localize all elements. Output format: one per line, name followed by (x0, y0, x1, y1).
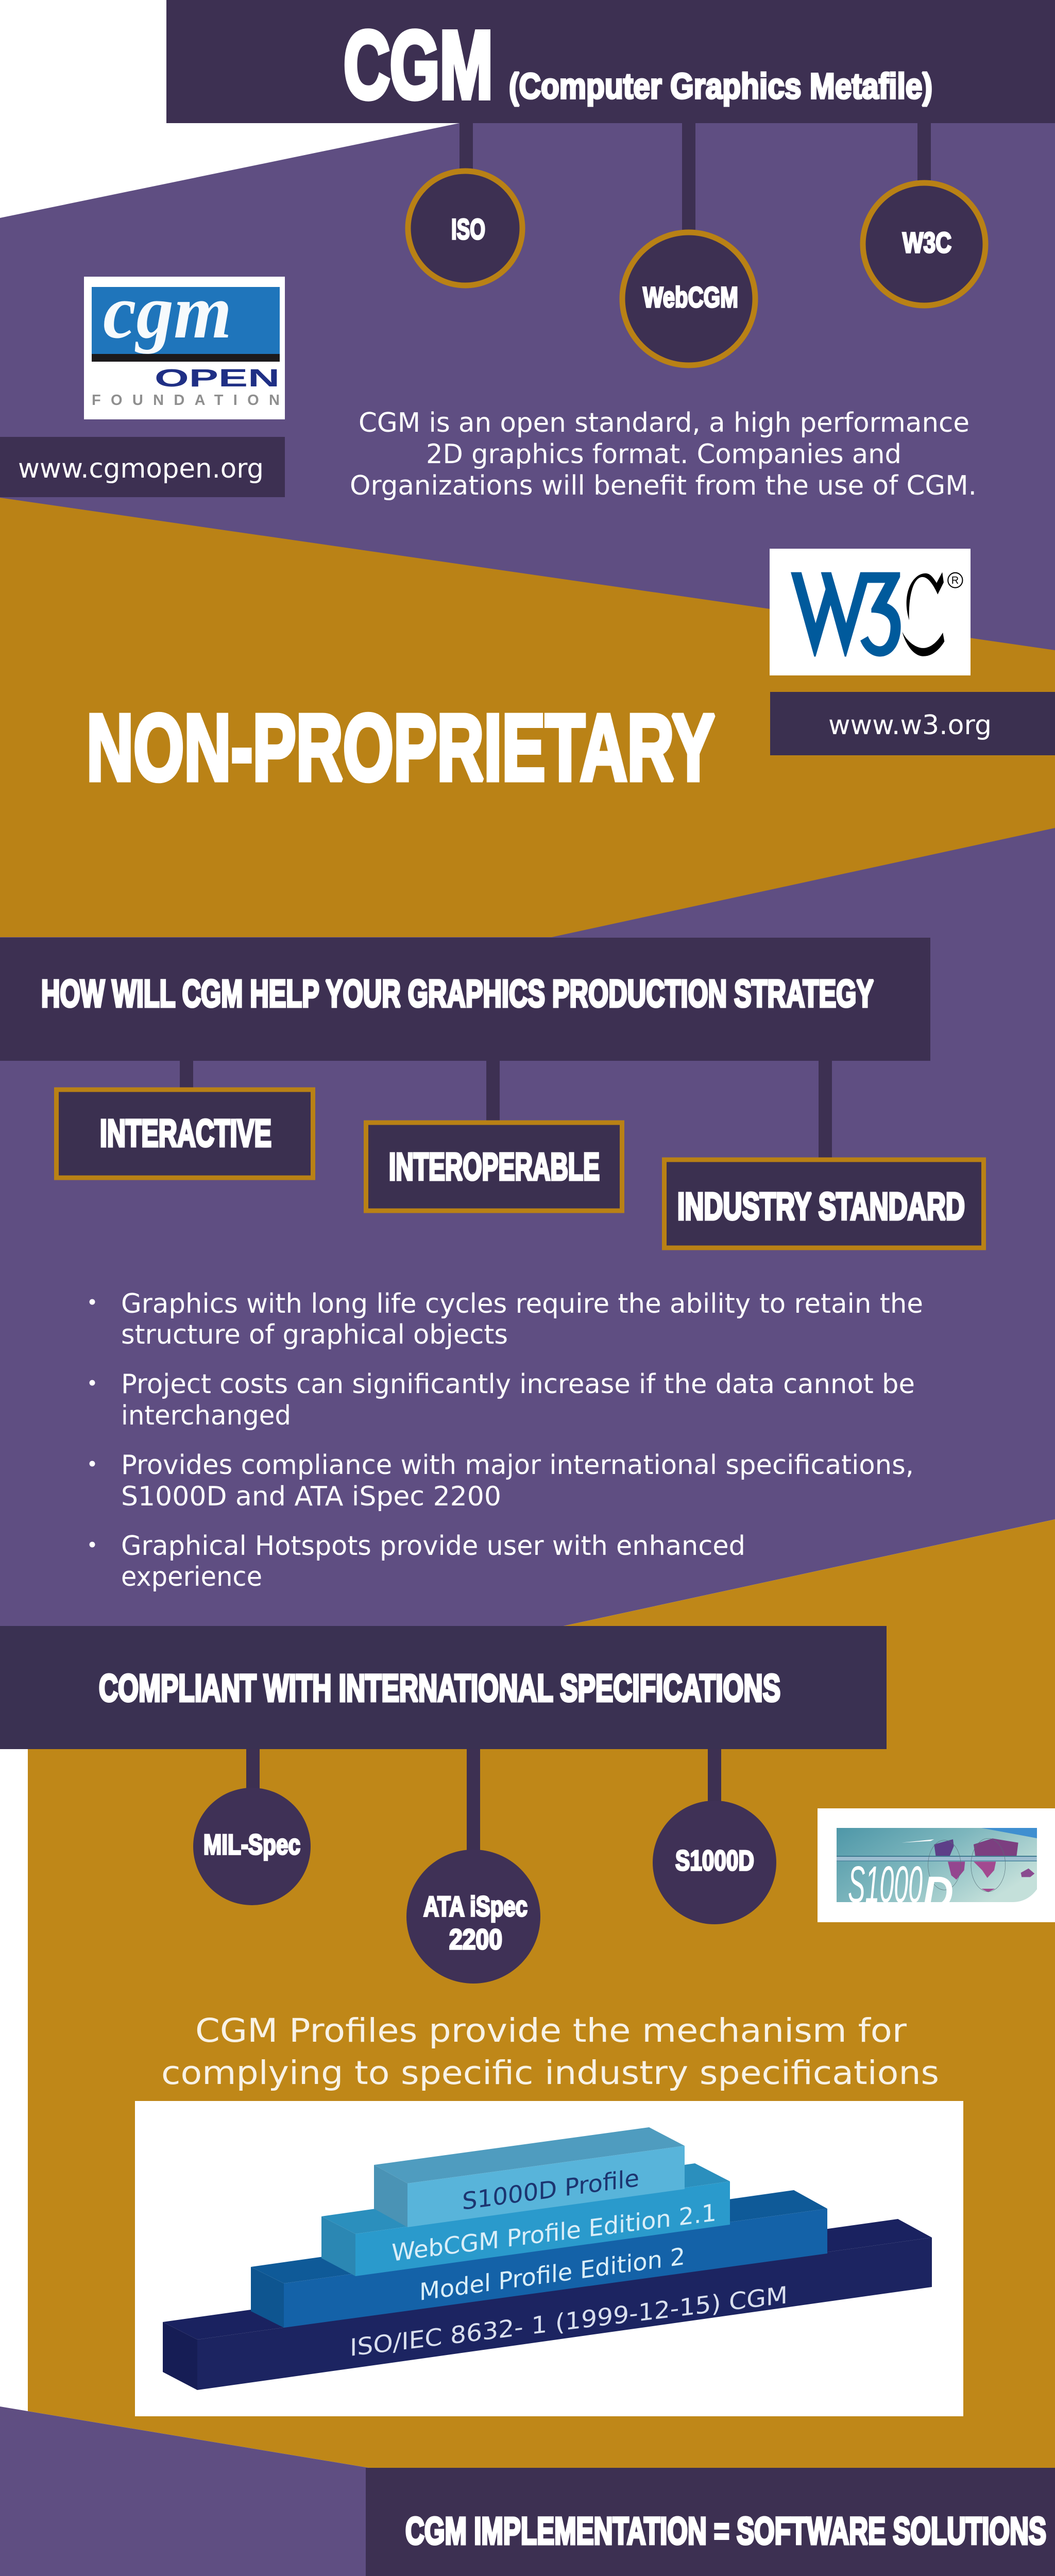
bullet list (90, 1289, 923, 1592)
logo: W3C: R (951, 575, 959, 586)
layer: S1000D Profile (374, 2127, 685, 2227)
bullet list: Project costs can significantly increase if the data cannot be (121, 1369, 915, 1400)
panel: software solutions (45, 2468, 1055, 2576)
background: gold band behind specifications (28, 1519, 1055, 2421)
badge: ISO (408, 171, 522, 285)
badge: MIL-Spec (193, 1788, 311, 1905)
badge: W3C (863, 183, 985, 306)
logo: CGM Open Foundation: OPEN (155, 365, 280, 392)
bullet list: interchanged (121, 1400, 291, 1431)
heading: non-proprietary: NON-PROPRIETARY (87, 694, 715, 800)
panel: production strategy (0, 938, 984, 1592)
title banner (166, 0, 1055, 123)
badge: ATA iSpec 2200 (406, 1850, 540, 1984)
subtitle: (Computer Graphics Metafile) (509, 66, 932, 106)
stem: WebCGM (682, 123, 695, 234)
intro text: Organizations will benefit from the use of CGM. (350, 470, 977, 501)
bullet list: structure of graphical objects (121, 1319, 508, 1350)
title: CGM (344, 12, 493, 118)
bullet list: Graphical Hotspots provide user with enhanced (121, 1531, 745, 1562)
badge: ATA iSpec 2200: ATA iSpec (423, 1890, 528, 1922)
link: w3.org: www.w3.org (828, 710, 992, 741)
logo: CGM Open Foundation: FOUNDATION (92, 392, 280, 409)
stem: S1000D (708, 1749, 721, 1803)
badge: WebCGM: WebCGM (643, 281, 738, 313)
profiles text: CGM Profiles provide the mechanism for (195, 2012, 907, 2049)
background: end of gold band (90, 2421, 1055, 2468)
stem: MIL-Spec (246, 1749, 260, 1790)
background: upper purple band (0, 123, 1055, 1626)
chart: CGM profile stack (135, 2101, 963, 2416)
layer: ISO/IEC 8632-1 CGM: ISO/IEC 8632- 1 (1999-12-15) CGM (350, 2281, 788, 2362)
badge: ISO: ISO (451, 213, 485, 245)
bullet list: S1000D and ATA iSpec 2200 (121, 1481, 501, 1512)
stem: interoperable (486, 1061, 500, 1122)
logo: S1000D: S1000 (848, 1856, 923, 1913)
background: purple start of lower band (0, 2406, 90, 2421)
panel: international specifications (0, 1626, 1055, 2416)
box: interactive (57, 1090, 313, 1178)
layer: WebCGM Profile Edition 2.1 (321, 2163, 730, 2276)
layer: Model Profile Edition 2 (251, 2190, 827, 2328)
link: w3.org (770, 692, 1055, 755)
stem: W3C (917, 123, 931, 184)
logo: S1000D: D (923, 1867, 954, 1920)
intro text (350, 408, 977, 501)
stem: interactive (180, 1061, 193, 1089)
badge: MIL-Spec: MIL-Spec (203, 1828, 300, 1860)
bullet list: experience (121, 1562, 262, 1592)
logo: S1000D (818, 1808, 1055, 1922)
link: cgmopen.org (0, 437, 285, 497)
box: interactive: INTERACTIVE (100, 1112, 271, 1155)
bullet list: Provides compliance with major international specifications, (121, 1450, 914, 1481)
logo: CGM Open Foundation (84, 269, 285, 419)
layer: WebCGM Profile Edition 2.1: WebCGM Profile Edition 2.1 (392, 2198, 717, 2267)
stem: industry standard (819, 1061, 832, 1159)
bullet list: Graphics with long life cycles require the ability to retain the (121, 1289, 923, 1319)
logo: W3C (770, 549, 971, 675)
stem: ATA iSpec (467, 1749, 480, 1852)
link: cgmopen.org: www.cgmopen.org (18, 453, 264, 484)
section header: specifications: COMPLIANT WITH INTERNATIONAL SPECIFICATIONS (99, 1667, 780, 1709)
panel: non-proprietary (87, 549, 1055, 800)
intro text: CGM is an open standard, a high performance (359, 408, 969, 438)
intro text: 2D graphics format. Companies and (426, 439, 901, 470)
panel: title section (0, 0, 1055, 501)
box: interoperable (366, 1123, 622, 1211)
layer: S1000D Profile: S1000D Profile (462, 2164, 639, 2215)
layer: Model Profile Edition 2: Model Profile Edition 2 (419, 2242, 685, 2306)
badge: WebCGM (622, 232, 755, 365)
profiles text: complying to specific industry specifications (161, 2054, 939, 2092)
background: lower purple band (0, 2421, 1055, 2576)
section header: strategy (0, 938, 930, 1061)
box: industry standard (665, 1160, 984, 1248)
badge: S1000D: S1000D (675, 1844, 754, 1876)
logo: CGM Open Foundation: cgm (103, 269, 232, 354)
layer: ISO/IEC 8632-1 CGM (163, 2219, 932, 2390)
badge: W3C: W3C (903, 226, 951, 259)
stem: ISO (460, 123, 473, 172)
box: interoperable: INTEROPERABLE (389, 1145, 600, 1188)
badge: ATA iSpec 2200: 2200 (449, 1923, 502, 1955)
badge: S1000D (653, 1801, 776, 1924)
profiles text (161, 2012, 939, 2092)
section header: implementation (366, 2468, 1055, 2576)
section header: specifications (0, 1626, 887, 1749)
background: gold band behind non-proprietary (0, 498, 1055, 937)
